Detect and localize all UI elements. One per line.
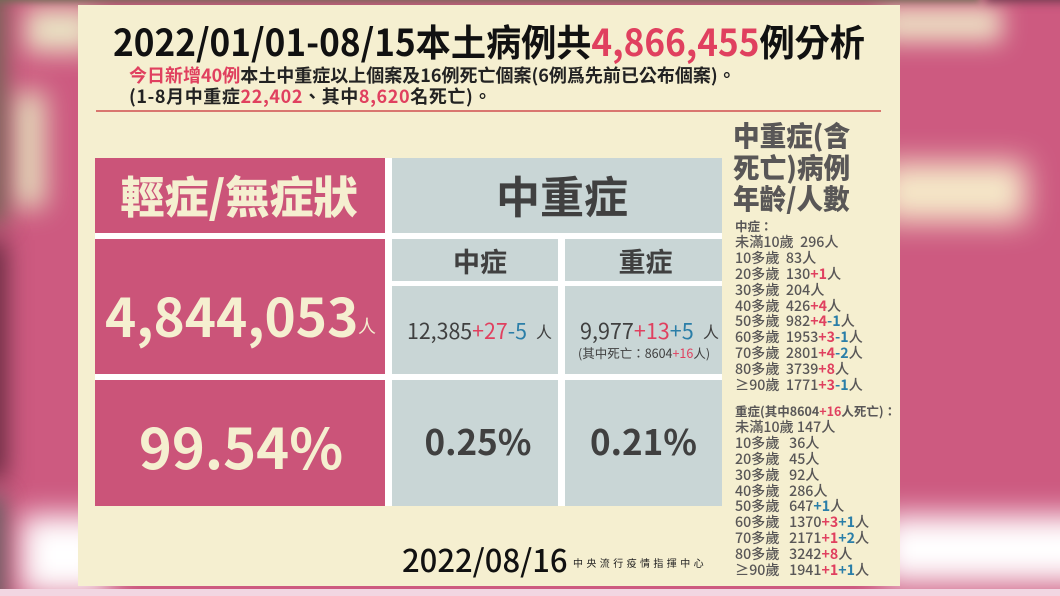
moderate age list: 中症： bbox=[735, 216, 773, 235]
panel: critical header bbox=[565, 239, 722, 281]
panel: moderate percent: 0.25% bbox=[424, 414, 532, 466]
moderate age list: 40多歲 426+4人 bbox=[735, 296, 841, 316]
panel: moderate count: 12,385+27-5 bbox=[407, 314, 527, 346]
panel: critical count bbox=[565, 286, 722, 374]
critical age list: 60多歲 1370+3+1人 bbox=[735, 512, 869, 532]
age heading: 死亡)病例 bbox=[733, 146, 850, 186]
subtitle bbox=[129, 62, 736, 109]
moderate age list bbox=[735, 216, 863, 395]
panel: critical header: 重症 bbox=[618, 240, 672, 280]
moderate age list: 80多歲 3739+8人 bbox=[735, 359, 849, 379]
panel: mild header bbox=[95, 158, 385, 233]
panel: mild count: 人 bbox=[358, 313, 376, 339]
source: 中央流行疫情指揮中心 bbox=[573, 555, 707, 570]
panel: mild count: 4,844,053 bbox=[105, 277, 358, 353]
panel: severe header: 中重症 bbox=[496, 162, 628, 226]
table backing bbox=[95, 158, 722, 506]
panel: mild percent bbox=[95, 380, 385, 506]
title: 2022/01/01-08/15本土病例共4,866,455例分析 bbox=[113, 13, 865, 67]
critical age list: 50多歲 647+1人 bbox=[735, 496, 844, 516]
panel: moderate header bbox=[392, 239, 558, 281]
critical age list bbox=[735, 401, 896, 580]
critical age list: 40多歲 286人 bbox=[735, 481, 828, 501]
critical age list: 70多歲 2171+1+2人 bbox=[735, 528, 869, 548]
moderate age list: 70多歲 2801+4-2人 bbox=[735, 343, 863, 363]
critical age list: 20多歲 45人 bbox=[735, 449, 820, 469]
critical age list: 未滿10歲 147人 bbox=[735, 417, 835, 437]
moderate age list: ≥90歲 1771+3-1人 bbox=[735, 375, 863, 395]
panel: moderate count bbox=[392, 286, 558, 374]
panel: severe header bbox=[392, 158, 722, 233]
moderate age list: 20多歲 130+1人 bbox=[735, 264, 841, 284]
moderate age list: 未滿10歲 296人 bbox=[735, 232, 839, 252]
panel: critical count: 9,977+13+5 bbox=[580, 314, 694, 346]
critical age list: 10多歲 36人 bbox=[735, 433, 820, 453]
panel: critical count: 人 bbox=[703, 319, 719, 343]
card bbox=[78, 5, 900, 586]
panel: critical count: (其中死亡：8604+16人) bbox=[578, 343, 710, 362]
critical age list: 重症(其中8604+16人死亡)： bbox=[735, 401, 896, 420]
panel: mild header: 輕症/無症狀 bbox=[121, 162, 357, 226]
age heading: 中重症(含 bbox=[733, 115, 850, 155]
moderate age list: 10多歲 83人 bbox=[735, 248, 816, 268]
age heading bbox=[733, 115, 850, 218]
panel: moderate header: 中症 bbox=[453, 240, 507, 280]
panel: mild count bbox=[95, 239, 385, 374]
panel: moderate count: 人 bbox=[536, 319, 552, 343]
critical age list: 30多歲 92人 bbox=[735, 465, 820, 485]
subtitle: 今日新增40例本土中重症以上個案及16例死亡個案(6例爲先前已公布個案)。 bbox=[129, 62, 736, 88]
moderate age list: 60多歲 1953+3-1人 bbox=[735, 327, 863, 347]
panel: critical percent bbox=[565, 380, 722, 506]
panel: moderate percent bbox=[392, 380, 558, 506]
age heading: 年齡/人數 bbox=[733, 178, 850, 218]
panel: critical percent: 0.21% bbox=[590, 414, 697, 466]
critical age list: 80多歲 3242+8人 bbox=[735, 544, 852, 564]
date: 2022/08/16 bbox=[402, 536, 568, 581]
moderate age list: 50多歲 982+4-1人 bbox=[735, 311, 855, 331]
moderate age list: 30多歲 204人 bbox=[735, 280, 824, 300]
divider line bbox=[96, 110, 881, 112]
critical age list: ≥90歲 1941+1+1人 bbox=[735, 560, 869, 580]
subtitle: (1-8月中重症22,402、其中8,620名死亡)。 bbox=[129, 83, 492, 109]
panel: mild percent: 99.54% bbox=[139, 404, 343, 486]
